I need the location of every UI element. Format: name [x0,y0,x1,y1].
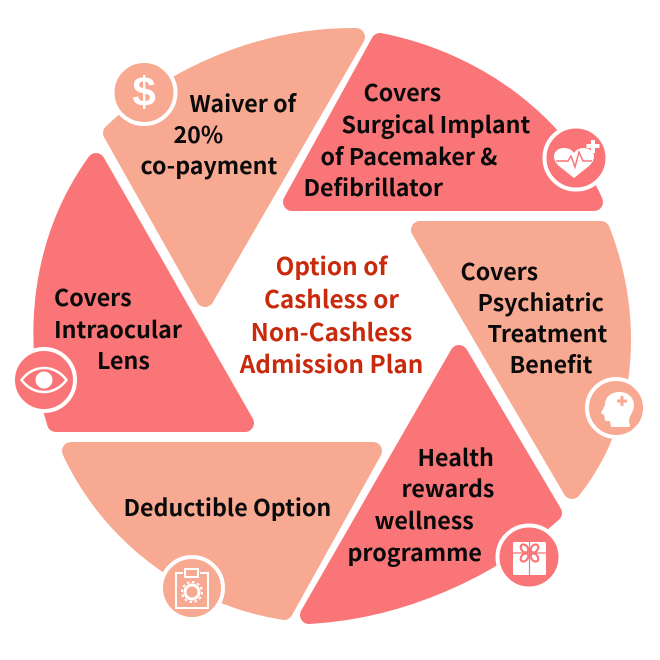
icon: gift box [498,526,560,588]
icon: heart with pulse [544,126,608,190]
text: covers surgical implant: Surgical Implant [342,106,530,140]
text: covers surgical implant: Covers [364,74,441,108]
text: covers psychiatric treatment benefit: Psychiatric [478,284,604,318]
text: deductible option: Deductible Option [124,489,331,523]
panel: intraocular lens segment [42,162,245,423]
text: covers intraocular lens: Lens [97,342,150,376]
text: waiver of 20% co-payment: Waiver of [190,85,298,119]
icon: head with plus [587,379,645,437]
icon: dollar [112,61,176,124]
center title: Admission Plan [239,345,423,380]
panel: surgical implant segment [292,42,594,203]
icon: clipboard with gear [161,557,223,619]
center title: Option of [276,247,388,282]
text: covers surgical implant: of Pacemaker & [320,138,497,172]
text: covers intraocular lens: Covers [54,279,132,313]
text: covers psychiatric treatment benefit: Covers [460,253,538,287]
text: covers intraocular lens: Intraocular [54,311,183,345]
text: covers psychiatric treatment benefit: Treatment [488,315,608,349]
text: waiver of 20% co-payment: co-payment [140,147,277,181]
text: waiver of 20% co-payment: 20% [174,116,223,150]
text: health rewards wellness programme: rewards [402,470,494,504]
text: covers surgical implant: Defibrillator [304,169,444,203]
text: health rewards wellness programme: programme [348,534,482,568]
icon: dollar: $ [132,68,156,115]
text: health rewards wellness programme: wellness [374,502,474,536]
center title: Non-Cashless [251,313,412,348]
panel: psychiatric treatment segment [420,230,622,490]
text: health rewards wellness programme: Health [418,439,494,473]
panel: deductible option segment [71,451,373,611]
text: covers psychiatric treatment benefit: Benefit [510,346,593,380]
panel: waiver of co-payment segment [112,37,356,298]
icon: eye [13,349,75,411]
center title: Cashless or [264,280,399,315]
panel: health rewards segment [309,354,553,615]
